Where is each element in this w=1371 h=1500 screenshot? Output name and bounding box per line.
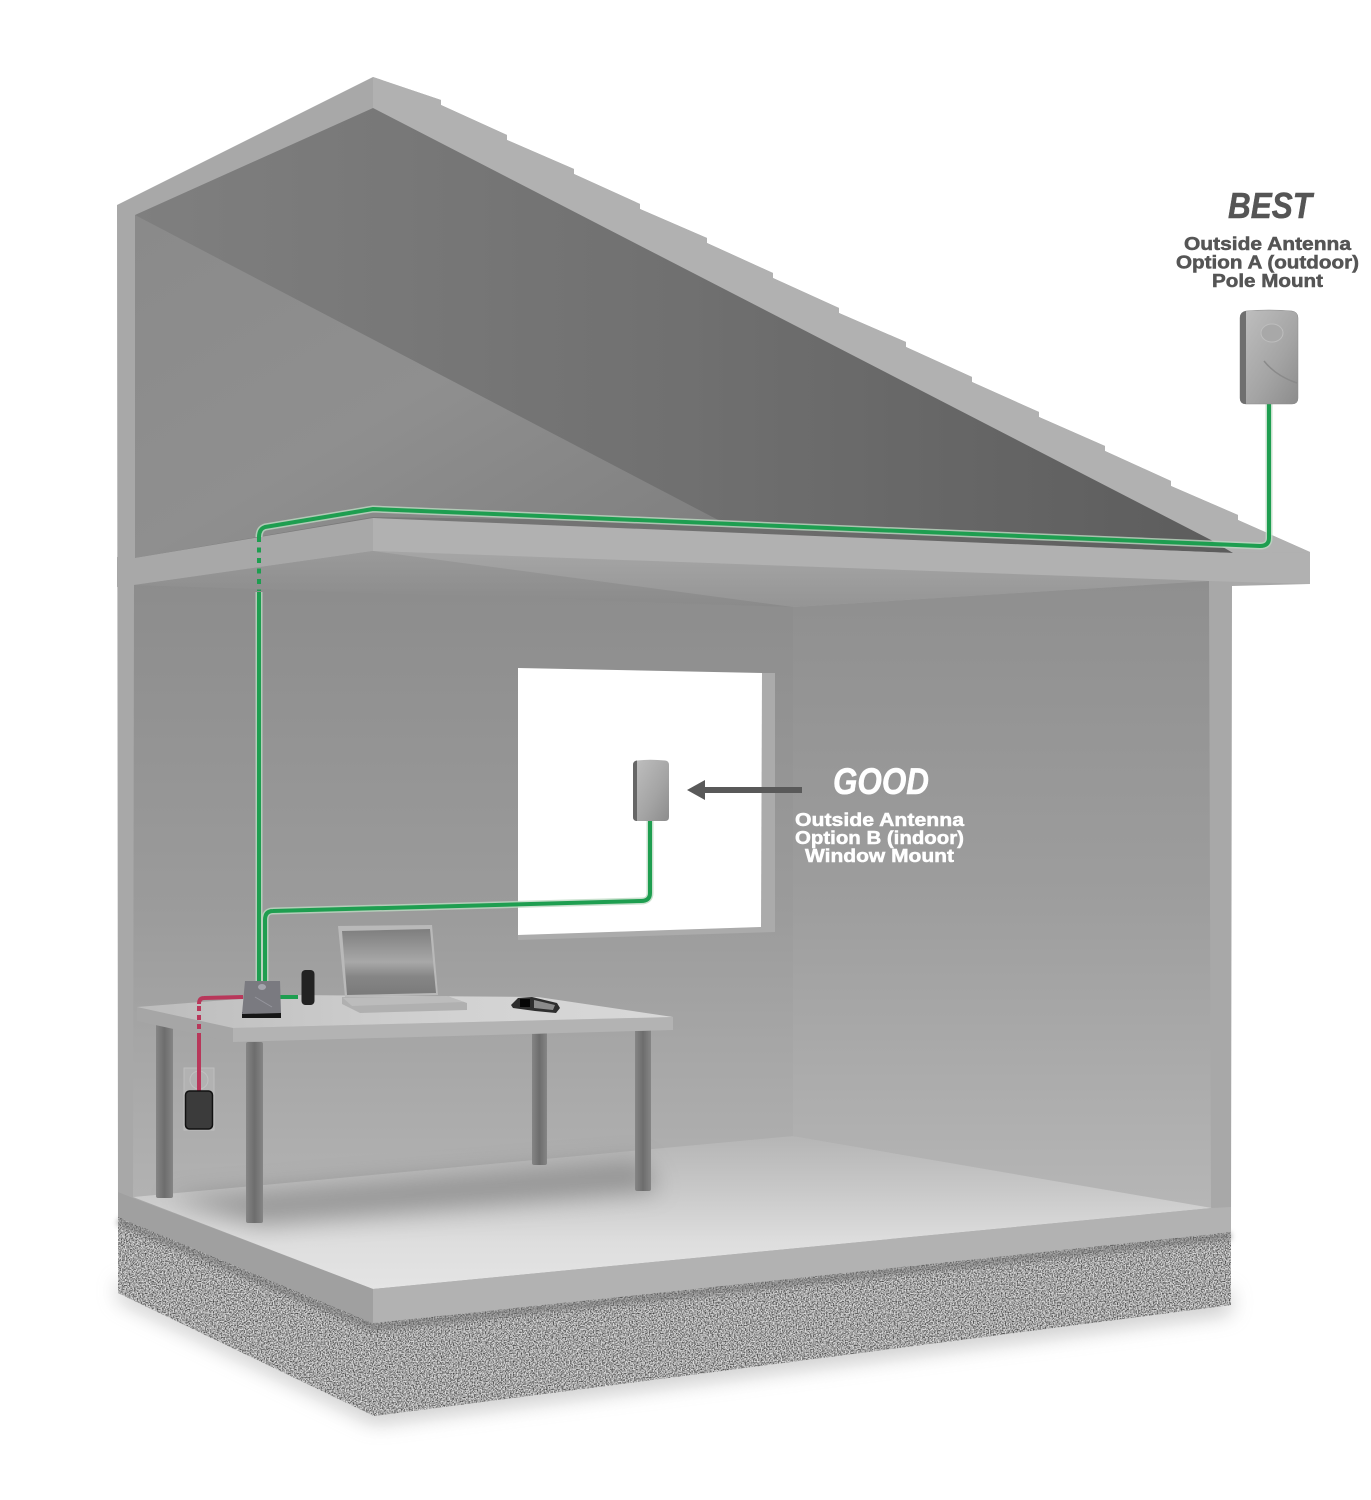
booster body [242,981,281,1014]
booster stub cable [280,995,298,999]
front leg [246,1042,263,1223]
description lines: Outside Antenna [1184,234,1352,254]
foundation top shadow [118,1221,1231,1327]
description lines: Outside Antenna [795,810,965,830]
house cross-section shell [117,77,1310,1323]
table [137,995,673,1223]
table legs [156,1020,173,1198]
laptop screen [342,929,436,995]
arrow pointing at window antenna [687,780,802,800]
right wall of room [793,581,1211,1208]
window [518,668,775,940]
table edge [137,1007,673,1042]
window reveal [518,673,775,940]
description lines [795,810,965,866]
laptop lid [338,925,438,997]
floor slab, right face [373,1207,1231,1323]
floor slab, left face [118,1192,373,1323]
description lines: Pole Mount [1212,271,1323,291]
attic back wall [135,215,722,558]
cable passing through floor [257,537,261,591]
label: GOOD [795,761,965,866]
outdoor antenna, pole mount [1240,310,1298,404]
mobile phone [511,997,560,1013]
laptop [338,925,467,1013]
laptop base [342,996,467,1013]
description lines: Option A (outdoor) [1176,252,1359,272]
inside antenna [302,970,314,1005]
window opening [518,668,762,935]
green cable: window antenna to booster [265,821,650,982]
floor surface [133,1136,1212,1289]
attic floor slab, left [117,518,373,587]
back wall of room [133,551,793,1197]
label: BEST [1176,185,1359,291]
power adapter [186,1091,212,1129]
heading BEST: BEST [1228,185,1315,226]
roof underside, dark slope [135,108,1233,558]
table top [137,995,673,1028]
roof section, right of ridge [373,77,1310,553]
ceiling [134,551,1209,607]
description lines [1176,234,1359,291]
green cable: outdoor antenna to booster [259,404,1269,982]
heading GOOD: GOOD [833,761,929,802]
antenna logo [1261,324,1283,342]
description lines: Option B (indoor) [795,828,964,848]
wall outlet [184,1068,214,1130]
booster base [242,1012,281,1018]
window antenna [633,760,669,821]
foundation [118,1215,1231,1416]
attic floor slab, front face [373,518,1310,584]
signal booster [242,981,298,1018]
description lines: Window Mount [805,846,954,866]
table shadow on floor [165,1160,660,1225]
ground shadow [118,1280,1231,1424]
red power cable [199,997,243,1092]
